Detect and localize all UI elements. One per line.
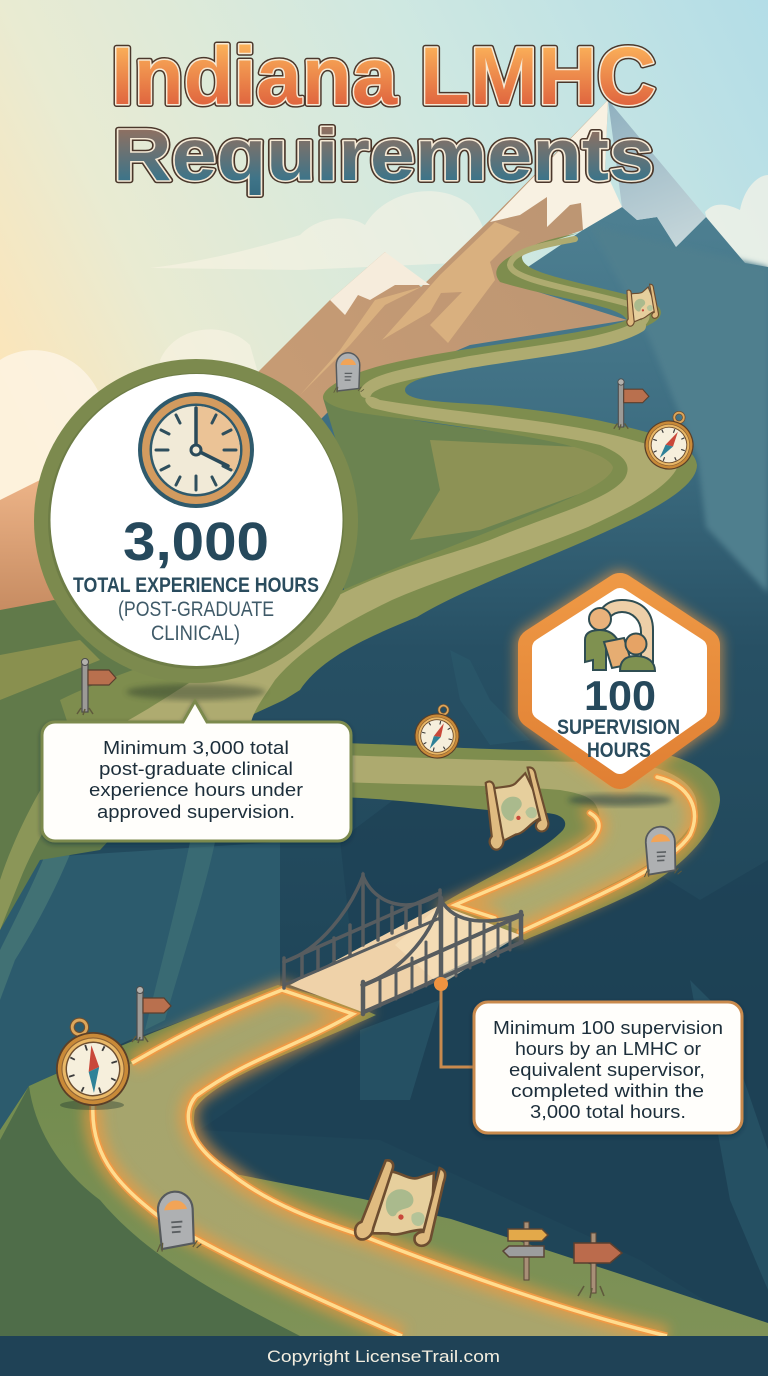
title line 1: Indiana LMHC	[111, 31, 656, 122]
connector line to supervision callout	[434, 977, 475, 1067]
upper winding road	[60, 233, 697, 790]
label: total experience hours: TOTAL EXPERIENCE HOURS	[73, 574, 319, 597]
landmark: map near summit	[617, 282, 663, 327]
callout: supervision	[474, 1002, 742, 1133]
lower road glowing edges	[93, 990, 667, 1336]
title line 2: Requirements	[113, 115, 654, 196]
landmark: map lower	[354, 1158, 446, 1248]
title line 1: Indiana LMHC	[111, 31, 656, 122]
landmark: signpost lower	[132, 986, 171, 1043]
green cliff below road	[323, 398, 628, 594]
title line 2: Requirements	[113, 115, 654, 196]
snow caps	[330, 100, 706, 315]
landmark: signpost left	[77, 658, 116, 715]
title line 1: Indiana LMHC	[111, 31, 656, 122]
label: supervision hours: SUPERVISION	[557, 716, 680, 739]
label: post-graduate clinical	[118, 598, 274, 645]
stat: 3,000: 3,000	[123, 512, 269, 572]
callout text	[89, 738, 303, 822]
label: supervision hours: HOURS	[587, 739, 651, 762]
label: post-graduate clinical: (POST-GRADUATE	[118, 598, 274, 621]
landmark: signpost right	[574, 1233, 622, 1298]
lower road	[93, 990, 667, 1336]
dark rock facets	[200, 750, 768, 1340]
callout text: post-graduate clinical	[99, 759, 293, 779]
landmark: compass middle	[410, 700, 466, 763]
left green slopes	[0, 600, 240, 930]
icon: clock	[138, 392, 254, 508]
landmark: compass upper	[638, 405, 703, 476]
lower green hillside	[0, 985, 768, 1336]
landmark: double signpost	[503, 1222, 548, 1280]
callout text: experience hours under	[89, 780, 303, 800]
callout text: Minimum 100 supervision	[493, 1018, 723, 1038]
title line 2: Requirements	[113, 115, 654, 196]
landmark: gravestone middle	[642, 826, 682, 877]
middle road glowing edges	[455, 777, 695, 932]
callout: total experience	[42, 701, 351, 841]
landmark: gravestone lower	[153, 1190, 202, 1252]
callout text: completed within the	[511, 1081, 704, 1101]
callout text	[493, 1018, 723, 1122]
label: supervision hours	[557, 716, 680, 762]
tan mountain	[255, 100, 627, 440]
callout text: equivalent supervisor,	[509, 1060, 705, 1080]
title	[111, 31, 656, 196]
suspension bridge	[284, 874, 522, 1014]
middle road section	[340, 743, 720, 940]
landmark: large compass	[43, 1009, 138, 1114]
landmark: map middle	[468, 764, 557, 851]
label: post-graduate clinical: CLINICAL)	[151, 622, 240, 645]
callout text: 3,000 total hours.	[530, 1102, 686, 1122]
copyright text: Copyright LicenseTrail.com	[267, 1347, 500, 1366]
callout text: hours by an LMHC or	[515, 1039, 701, 1059]
shadow beneath hexagon	[568, 794, 672, 806]
stat: 100: 100	[584, 672, 656, 719]
lighter right face of mountain	[590, 225, 768, 593]
panel: total experience hours badge	[34, 359, 358, 683]
tan light facets	[300, 222, 520, 395]
footer	[0, 1336, 768, 1376]
callout text: Minimum 3,000 total	[103, 738, 289, 758]
clouds	[0, 175, 768, 520]
landmark: gravestone at upper bend	[334, 353, 364, 393]
icon: supervisor and supervisee	[585, 600, 655, 671]
left brown hill	[0, 480, 120, 625]
shadow beneath circle badge	[126, 684, 266, 700]
callout text: approved supervision.	[97, 802, 295, 822]
hexagon glow	[535, 590, 703, 772]
lower-left teal slope with pale ridges	[0, 842, 280, 1130]
landmark: signpost upper	[614, 379, 649, 430]
panel: supervision hours badge	[535, 590, 703, 772]
